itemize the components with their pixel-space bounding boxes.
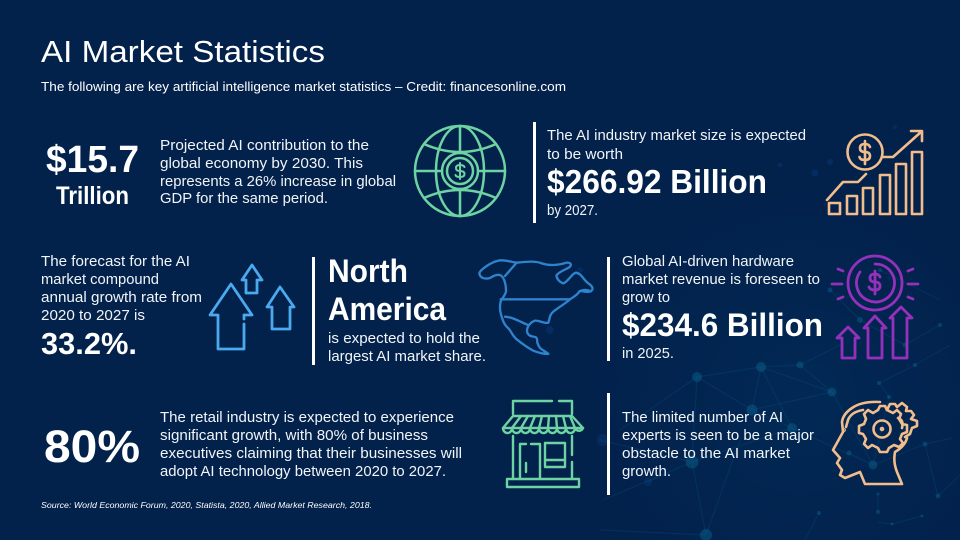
text block: retail: The retail industry is expected to experience xyxy=(160,410,454,426)
divider bar xyxy=(607,257,610,361)
text block: North America xyxy=(328,253,486,365)
text block: AI experts: growth. xyxy=(622,464,671,480)
panel: global economy stat xyxy=(46,126,505,216)
divider bar xyxy=(607,393,610,495)
text block: North America: is expected to hold the xyxy=(328,331,480,347)
panel: North America xyxy=(312,253,593,365)
text block: AI experts: experts is seen to be a major xyxy=(622,428,814,444)
text block: growth rate: market compound xyxy=(41,272,159,288)
text block: retail: adopt AI technology between 2020 to 2027. xyxy=(160,464,446,480)
icon: three up arrows xyxy=(210,265,294,349)
text block: hardware revenue xyxy=(622,254,823,362)
text block: growth rate: 2020 to 2027 is xyxy=(41,308,145,324)
big number: $15.7 Trillion: $15.7 xyxy=(46,139,139,181)
panel: hardware revenue xyxy=(607,254,918,362)
text block: North America: America xyxy=(328,291,446,327)
icon: growth chart with coin xyxy=(827,131,922,214)
title: AI Market Statistics xyxy=(41,34,325,69)
text block: market size: by 2027. xyxy=(547,203,598,219)
text block: global economy: GDP for the same period. xyxy=(160,191,328,207)
subtitle: The following are key artificial intelligence market statistics – Credit: financesonline.com xyxy=(41,80,566,94)
panel: market size xyxy=(533,122,922,223)
big number: 80%: 80% xyxy=(44,421,140,472)
divider bar xyxy=(533,122,536,223)
text block: North America: largest AI market share. xyxy=(328,349,486,365)
divider bar xyxy=(312,257,315,365)
text block: hardware revenue: Global AI-driven hardware xyxy=(622,254,794,270)
text block: hardware revenue: grow to xyxy=(622,290,670,306)
text block: market size: The AI industry market size is expected xyxy=(547,128,806,144)
icon: head with gears xyxy=(833,402,917,484)
text block: retail: executives claiming that their businesses will xyxy=(160,446,462,462)
text block: retail xyxy=(160,410,462,480)
panel: growth rate xyxy=(41,254,294,361)
text block: growth rate: The forecast for the AI xyxy=(41,254,190,270)
icon: globe with dollar xyxy=(415,126,505,216)
text block: AI experts: The limited number of AI xyxy=(622,410,783,426)
text block: global economy: Projected AI contribution to the xyxy=(160,138,369,154)
icon: North America map xyxy=(479,260,593,354)
icon: coin with rising arrows xyxy=(832,256,918,358)
text block: hardware revenue: in 2025. xyxy=(622,346,674,362)
text block: hardware revenue: $234.6 Billion xyxy=(622,307,823,343)
icon: storefront xyxy=(503,401,583,487)
text block: AI experts: obstacle to the AI market xyxy=(622,446,790,462)
big number: $15.7 Trillion: Trillion xyxy=(56,182,129,210)
text block: market size xyxy=(547,128,806,219)
text block: growth rate: 33.2%. xyxy=(41,326,137,361)
big number: $15.7 Trillion xyxy=(46,139,139,210)
text block: global economy: represents a 26% increase in global xyxy=(160,174,396,190)
panel: retail xyxy=(44,401,583,487)
text block: market size: $266.92 Billion xyxy=(547,163,767,200)
text block: growth rate: annual growth rate from xyxy=(41,290,202,306)
panel: AI experts xyxy=(607,393,917,495)
text block: hardware revenue: market revenue is foreseen to xyxy=(622,272,820,288)
source note: Source: World Economic Forum, 2020, Statista, 2020, Allied Market Research, 2018. xyxy=(41,500,372,510)
text block: global economy: global economy by 2030. This xyxy=(160,156,363,172)
text block: North America: North xyxy=(328,253,408,289)
text block: AI experts xyxy=(622,410,814,480)
text block: global economy xyxy=(160,138,396,207)
text block: growth rate xyxy=(41,254,202,361)
text block: market size: to be worth xyxy=(547,147,623,163)
text block: retail: significant growth, with 80% of business xyxy=(160,428,428,444)
